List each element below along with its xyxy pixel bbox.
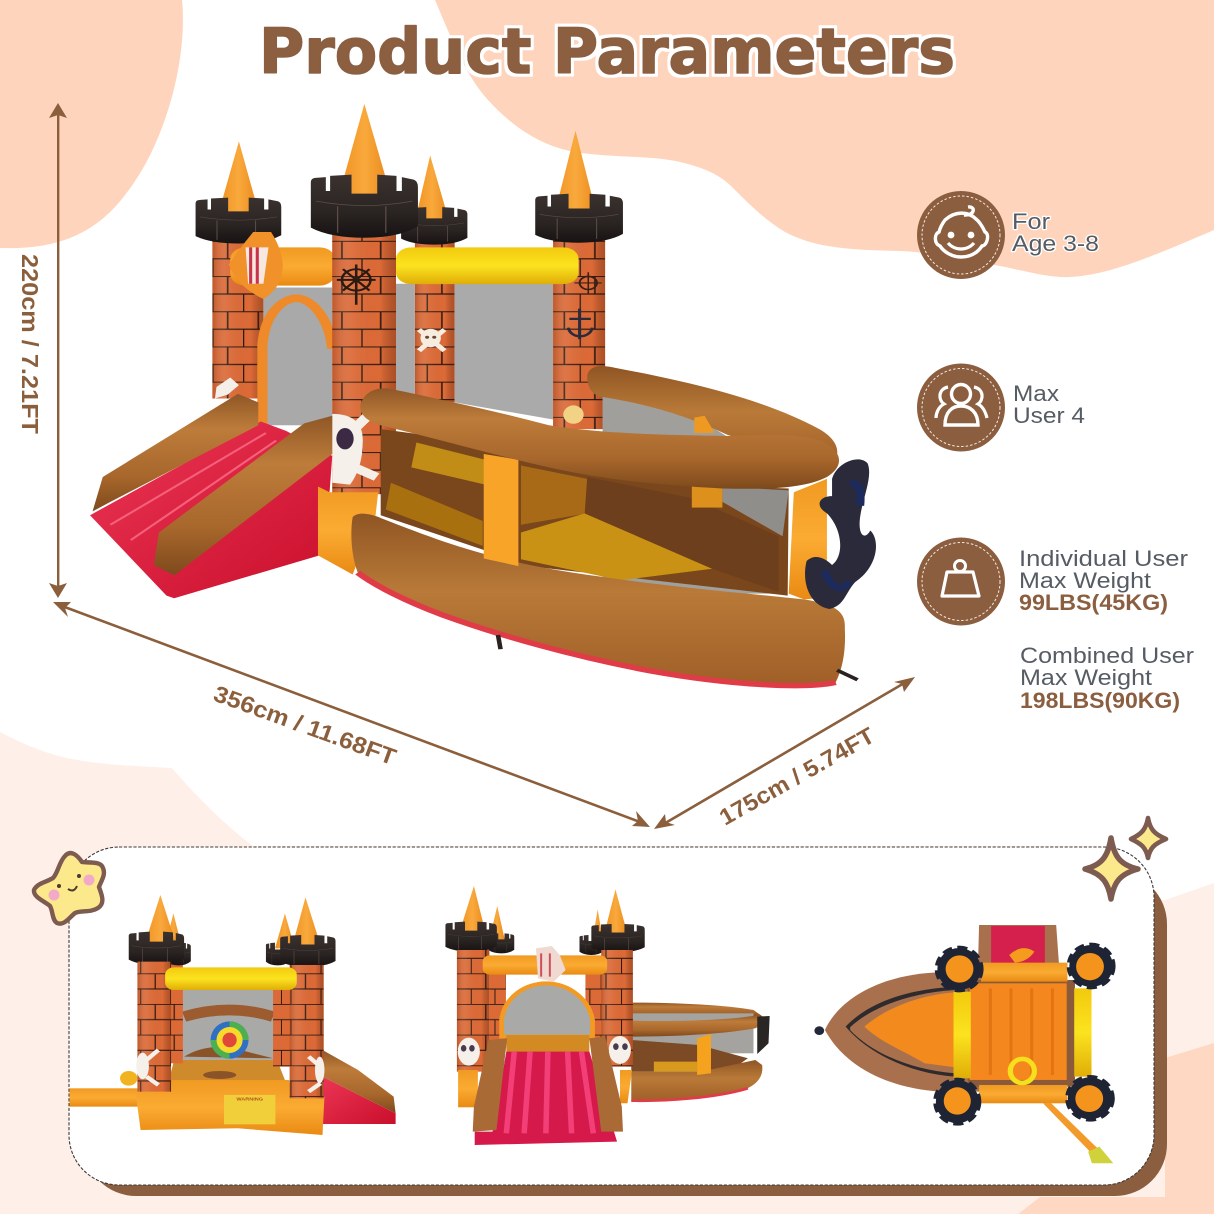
tail tube (1043, 1103, 1098, 1152)
icon: three users (917, 364, 1005, 452)
hull red trim (631, 1088, 748, 1101)
red slide (475, 1052, 617, 1145)
ship emblem (536, 946, 566, 982)
yellow knot (120, 1071, 137, 1086)
orange base (135, 1080, 324, 1135)
view: slide side (445, 886, 645, 1145)
orange pillar bow (789, 479, 827, 599)
yellow beam (396, 247, 579, 284)
slide red bed (90, 421, 332, 598)
slide at side (322, 1077, 396, 1124)
panel: product views (69, 847, 1167, 1196)
dimension: width arrow (654, 677, 915, 829)
back towers (489, 906, 506, 943)
hero product: inflatable pirate castle with ship (90, 104, 876, 686)
mesh wall centre (396, 283, 553, 420)
hull red trim (358, 573, 836, 686)
orange beam (483, 955, 607, 975)
right tower (535, 131, 623, 429)
mesh arch (502, 983, 593, 1037)
slide ribs (110, 433, 276, 540)
slide right rail (154, 416, 332, 575)
text: individual user: Max Weight (1019, 568, 1152, 593)
panel card (69, 847, 1154, 1185)
orange deck (864, 992, 955, 1067)
spec: age (917, 191, 1099, 279)
back ship rail (587, 366, 837, 467)
interior rail (184, 1010, 273, 1017)
warning label: WARNING (236, 1097, 263, 1102)
skulls (136, 1050, 324, 1092)
view: ship side (620, 1003, 770, 1103)
skulls (458, 1038, 480, 1066)
skull print (332, 414, 377, 485)
interior floor (506, 1035, 589, 1053)
pirate ship emblem (229, 232, 283, 299)
text: max users: User 4 (1013, 403, 1085, 428)
view: top down (814, 925, 1113, 1163)
base orange (458, 1070, 478, 1107)
floor (968, 980, 1075, 1087)
spec: max users (917, 364, 1085, 452)
dimension: height label: 220cm / 7.21FT (17, 254, 43, 434)
front ship rail (360, 388, 839, 489)
yellow ring (1010, 1059, 1034, 1083)
text: age: For (1012, 209, 1051, 234)
tower tops (936, 945, 1113, 1123)
icon: smiling star (34, 853, 104, 924)
emblem (1009, 948, 1034, 963)
text: individual weight: 99LBS(45KG) (1019, 590, 1168, 615)
orange base block (318, 487, 378, 575)
text: age: Age 3-8 (1012, 231, 1099, 256)
ship back rail (631, 1003, 763, 1017)
arch trim (262, 298, 332, 425)
ship wheel print (337, 265, 376, 305)
floor (166, 1060, 289, 1090)
anchor (757, 1016, 770, 1054)
slide rails (473, 1038, 507, 1132)
title: Product Parameters (259, 15, 955, 88)
far mesh (603, 395, 784, 594)
mast tip (814, 1026, 824, 1035)
dimension: length label: 356cm / 11.68FT (210, 680, 400, 770)
text: max users: Max (1013, 381, 1060, 406)
deck rim (846, 987, 955, 1077)
ship front rail (631, 1015, 765, 1037)
text: combined weight: 198LBS(90KG) (1020, 688, 1180, 713)
text: individual user: Individual User (1019, 546, 1189, 571)
ship interior seen through mesh (381, 429, 789, 596)
back mesh (180, 988, 275, 1060)
left towers (166, 913, 181, 945)
mesh wall left (263, 288, 332, 425)
front tower (311, 104, 418, 494)
warning label (224, 1095, 275, 1124)
background panel right peach tint (1018, 1043, 1214, 1214)
orange bars (981, 963, 1067, 982)
ship hull (351, 514, 845, 686)
skull on middle tower (419, 329, 444, 351)
ship hull (631, 1060, 762, 1101)
icon: large sparkle (1085, 838, 1138, 899)
dimension: width label: 175cm / 5.74FT (715, 722, 879, 830)
anchor print (568, 309, 592, 339)
icon: weight (917, 538, 1005, 626)
icon: baby face (917, 191, 1005, 279)
ship hull from above (825, 972, 981, 1092)
yellow bars (954, 992, 971, 1078)
deck interior (631, 1040, 748, 1072)
ship wheel print (580, 276, 597, 289)
back orange pillar (694, 416, 715, 433)
spec: weight (917, 538, 1195, 713)
background: lower pale wash (0, 732, 1214, 1214)
inflatable anchor (805, 459, 876, 609)
slide (978, 925, 1059, 967)
mesh (631, 1013, 753, 1053)
ground stakes (498, 635, 858, 680)
slide left rail (93, 394, 258, 511)
view: front with dart board (69, 895, 396, 1135)
text: combined user: Combined User (1020, 643, 1195, 668)
pillar (697, 1034, 711, 1075)
icon: small sparkle (1131, 818, 1166, 858)
dart board (211, 1021, 249, 1059)
slide (90, 394, 332, 598)
tower base (620, 1070, 632, 1103)
middle tower (401, 155, 467, 402)
background blob: top right (435, 0, 1214, 277)
orange beam (230, 247, 335, 286)
text: combined user: Max Weight (1020, 665, 1153, 690)
back left tower (196, 141, 281, 399)
dimension: length arrow (53, 602, 650, 827)
orange pillar front (484, 454, 518, 566)
dimension: height arrow (49, 103, 67, 598)
panel shadow (84, 872, 1167, 1196)
right towers (275, 913, 295, 948)
ship deck behind (184, 1047, 273, 1058)
yellow beam (165, 967, 297, 990)
background blob: top left (0, 0, 183, 248)
shell print (563, 405, 584, 424)
side tube (69, 1088, 141, 1107)
